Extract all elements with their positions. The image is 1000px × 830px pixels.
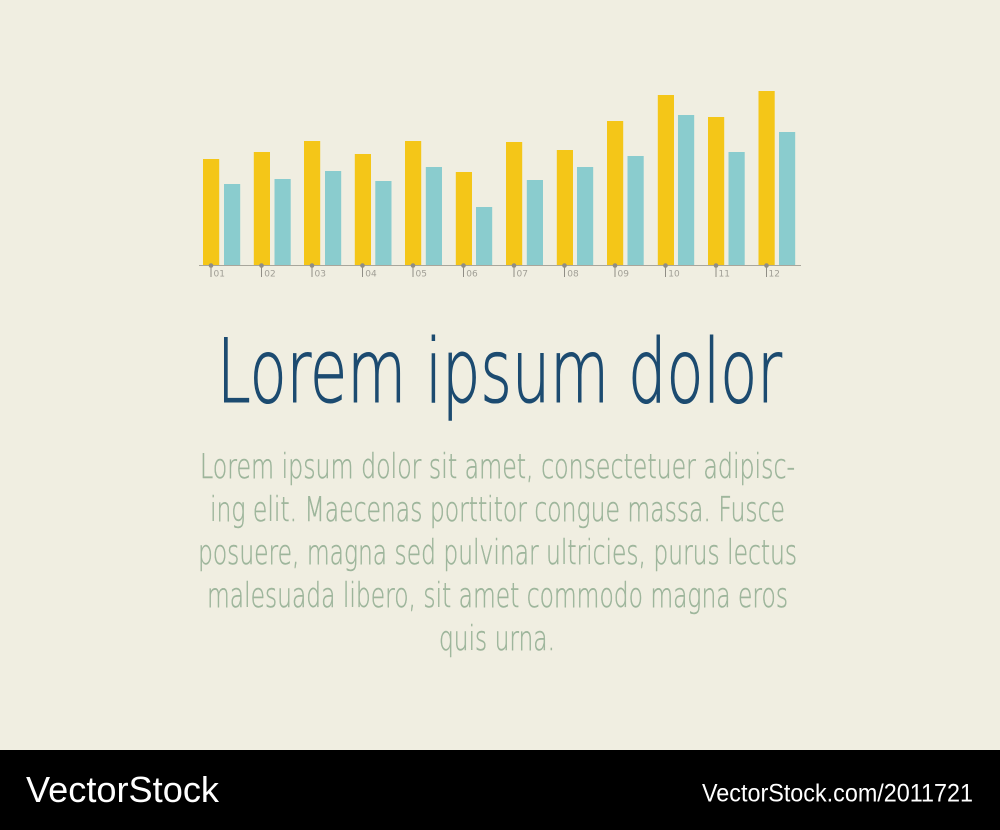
axis line <box>199 265 801 266</box>
body paragraph: quis urna. <box>439 619 555 659</box>
body paragraph <box>198 447 797 659</box>
footer image id: VectorStock.com/2011721 <box>702 780 973 808</box>
axis labels: 05 <box>416 270 427 280</box>
axis labels: 03 <box>314 270 326 280</box>
axis labels: 09 <box>618 270 629 280</box>
axis labels: 02 <box>264 270 276 280</box>
footer bar <box>0 750 1000 830</box>
axis ticks and markers <box>209 263 769 277</box>
axis labels: 07 <box>516 270 528 280</box>
axis labels: 04 <box>365 270 377 280</box>
axis labels: 06 <box>466 270 478 280</box>
axis labels <box>214 270 780 280</box>
axis labels: 08 <box>567 270 579 280</box>
bar chart <box>199 91 801 280</box>
axis labels: 01 <box>214 270 225 280</box>
footer logo: VectorStock <box>26 769 220 810</box>
axis labels: 12 <box>768 270 780 280</box>
axis labels: 11 <box>718 270 730 280</box>
yellow bars <box>203 91 775 265</box>
axis labels: 10 <box>668 270 680 280</box>
teal bars <box>224 115 795 265</box>
